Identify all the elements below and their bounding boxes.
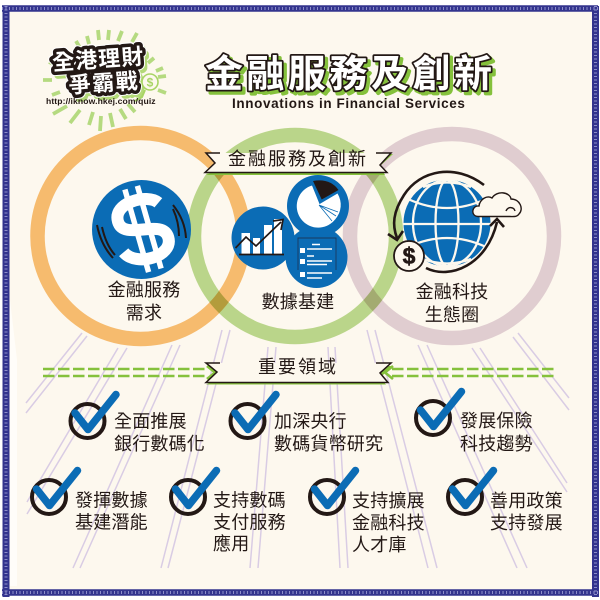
item: 支持擴展金融科技人才庫: 人才庫 — [352, 535, 407, 555]
item: 加深央行數碼貨幣研究: 加深央行 — [274, 412, 347, 432]
item: 全面推展銀行數碼化 — [70, 394, 205, 454]
logo heading — [51, 44, 150, 103]
item: 發展保險科技趨勢 — [416, 392, 533, 454]
label: 數據基建: 數據基建 — [262, 292, 334, 312]
item: 支持擴展金融科技人才庫 — [310, 470, 425, 555]
item: 加深央行數碼貨幣研究 — [230, 394, 383, 454]
item: 全面推展銀行數碼化: 全面推展 — [114, 412, 187, 432]
logo heading: 全港理財 — [51, 44, 145, 75]
label: 金融科技生態圈 — [416, 282, 488, 325]
label: 金融科技生態圈: 金融科技 — [416, 282, 488, 302]
logo heading: 全港理財 — [55, 48, 148, 79]
item: 善用政策支持發展: 支持發展 — [490, 513, 563, 533]
ring: pink — [350, 134, 554, 338]
title: 金融服務及創新 — [208, 57, 499, 99]
icon: globe with cloud — [388, 172, 521, 272]
item: 支持擴展金融科技人才庫: 支持擴展 — [352, 491, 425, 511]
item: 支持數碼支付服務應用: 支持數碼 — [213, 490, 286, 510]
label: 金融科技生態圈: 生態圈 — [425, 305, 479, 325]
item: 加深央行數碼貨幣研究: 數碼貨幣研究 — [274, 434, 383, 454]
item: 支持數碼支付服務應用: 支付服務 — [213, 512, 286, 532]
label: 金融服務需求 — [108, 280, 180, 323]
banner: key areas — [206, 357, 392, 384]
logo heading: 爭霸戰 — [68, 68, 140, 98]
ring: orange — [38, 133, 244, 339]
small dollar coin: $ — [403, 243, 416, 269]
logo heading: 全港理財 — [51, 44, 145, 75]
venn diagram rings — [38, 133, 554, 339]
cloud — [473, 193, 521, 217]
icon: bar chart — [232, 206, 294, 270]
logo: quiz badge — [43, 30, 166, 131]
label: 金融服務需求: 需求 — [126, 303, 162, 323]
item: 善用政策支持發展: 善用政策 — [490, 491, 563, 511]
item: 支持擴展金融科技人才庫: 金融科技 — [352, 513, 425, 533]
logo heading: 爭霸戰 — [68, 68, 140, 98]
subtitle: Innovations in Financial Services — [232, 96, 466, 111]
item: 支持數碼支付服務應用: 應用 — [213, 533, 249, 554]
item: 發展保險科技趨勢: 發展保險 — [460, 411, 533, 431]
item: 發展保險科技趨勢: 科技趨勢 — [460, 434, 533, 454]
logo heading: 爭霸戰 — [71, 72, 143, 102]
icon: pie chart — [287, 175, 349, 237]
item: 發揮數據基建潛能 — [32, 470, 148, 532]
logo url: http://iknow.hkej.com/quiz — [46, 96, 156, 106]
ring: green — [194, 135, 396, 337]
banner: top heading: 金融服務及創新 — [228, 149, 368, 169]
globe — [403, 180, 491, 266]
dashed arrows — [43, 366, 555, 379]
banner: top heading — [205, 149, 393, 175]
icon: checklist — [286, 226, 348, 288]
item: 善用政策支持發展 — [448, 470, 563, 533]
item: 發揮數據基建潛能: 發揮數據 — [75, 490, 148, 510]
banner: key areas: 重要領域 — [258, 357, 338, 377]
logo lightbulb icon: $ — [147, 76, 154, 90]
item: 支持數碼支付服務應用 — [171, 470, 286, 554]
icon: dollar coin — [92, 180, 191, 279]
cycle arrows — [388, 172, 504, 272]
logo rays — [43, 30, 166, 131]
label: 金融服務需求: 金融服務 — [108, 280, 180, 300]
item: 發揮數據基建潛能: 基建潛能 — [75, 512, 148, 532]
title: 金融服務及創新 — [205, 54, 496, 96]
item: 全面推展銀行數碼化: 銀行數碼化 — [114, 434, 205, 454]
